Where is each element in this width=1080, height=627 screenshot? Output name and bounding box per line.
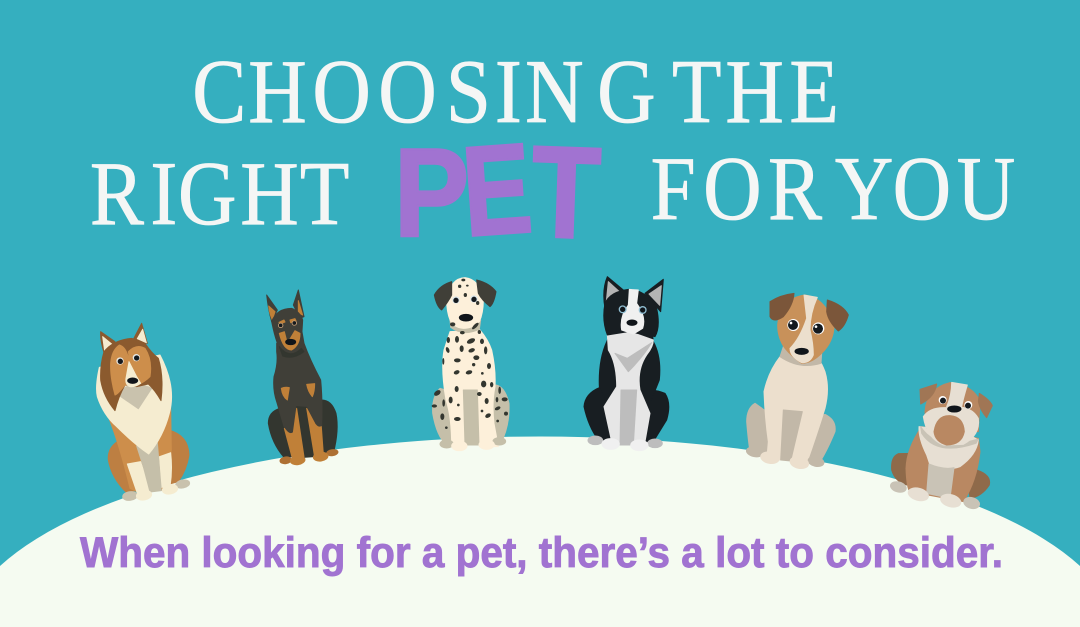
title word: pet — [394, 116, 603, 266]
title line: choosing the: CHOOSING THE — [192, 41, 839, 142]
subtitle: When looking for a pet, there’s a lot to consider. — [80, 529, 1003, 577]
title word: right: RIGHT — [90, 143, 349, 244]
title word: pet: E — [458, 116, 536, 263]
dog: bulldog — [889, 382, 992, 510]
title word: pet: P — [394, 124, 469, 263]
hill — [0, 436, 1080, 627]
title word: pet: T — [529, 118, 603, 266]
dog: black and white husky — [584, 277, 669, 451]
dog: doberman — [267, 290, 338, 466]
dog: jack russell — [746, 293, 848, 470]
title words: for you: FOR YOU — [651, 138, 1015, 239]
dog: collie — [97, 323, 190, 501]
dog: dalmatian — [432, 278, 509, 451]
title — [90, 41, 1015, 266]
